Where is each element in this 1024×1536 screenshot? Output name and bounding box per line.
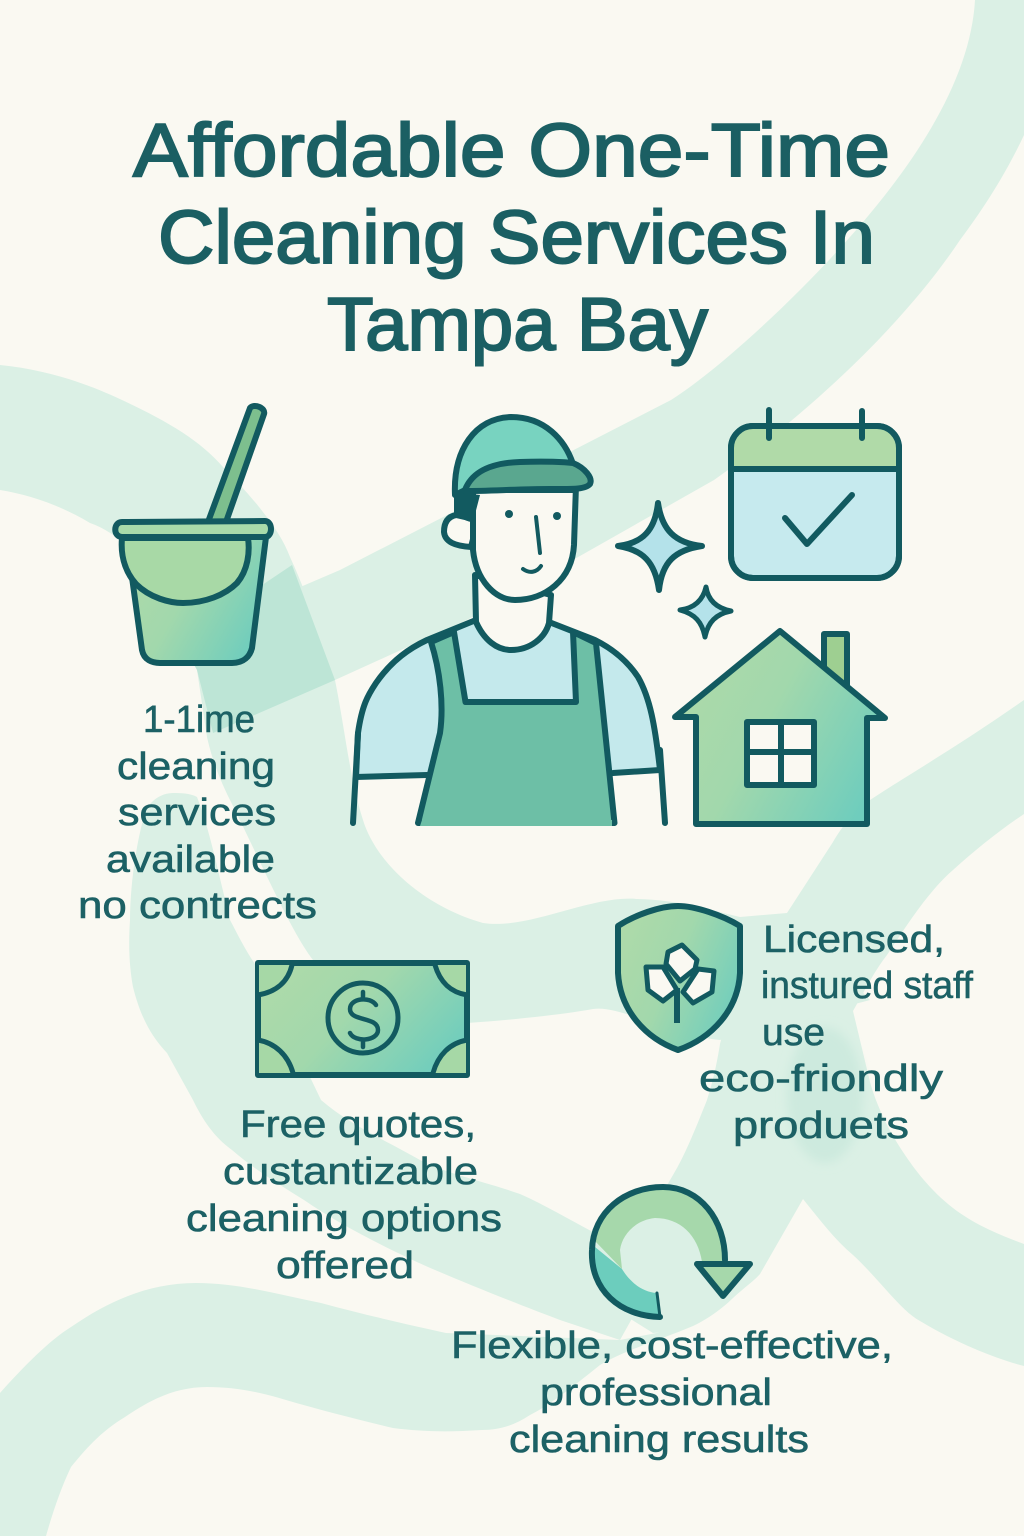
text: flexible results: professional	[540, 1372, 772, 1414]
text: one-time services: available	[106, 839, 275, 881]
text: licensed staff: produets	[733, 1105, 909, 1147]
hair	[454, 492, 480, 522]
text: licensed staff: instured staff	[761, 965, 973, 1007]
icon: shield with leaf	[618, 906, 740, 1050]
text: licensed staff: use	[762, 1012, 825, 1054]
icon: large sparkle	[618, 503, 702, 590]
text: one-time services: no contrects	[78, 885, 317, 927]
ear	[444, 515, 478, 547]
text: one-time services: services	[118, 792, 276, 834]
icon: calendar with check	[731, 410, 899, 578]
text: flexible results: Flexible, cost-effective,	[451, 1325, 893, 1367]
text: free quotes: offered	[276, 1245, 414, 1287]
icon: house	[675, 631, 885, 824]
text: one-time services	[78, 699, 317, 927]
neck	[475, 575, 551, 650]
face	[473, 485, 576, 600]
title: Tampa Bay	[327, 282, 709, 366]
shirt	[356, 620, 660, 777]
overalls apron	[418, 632, 614, 823]
text: flexible results: cleaning results	[509, 1419, 809, 1461]
title: Cleaning Services In	[158, 195, 875, 279]
cap brim	[465, 462, 591, 491]
text: free quotes: cleaning options	[186, 1198, 502, 1240]
arm lines	[353, 733, 665, 823]
text: flexible results	[451, 1325, 893, 1461]
cap	[455, 417, 575, 495]
icon: cleaner worker	[353, 417, 665, 826]
text: free quotes: custantizable	[223, 1151, 478, 1193]
title: Affordable One-Time	[133, 108, 890, 192]
title	[133, 108, 890, 366]
icon: small sparkle	[680, 587, 731, 637]
icon: circular arrow	[592, 1187, 750, 1317]
text: licensed staff: eco-friondly	[699, 1058, 943, 1100]
icon: dollar bill	[258, 963, 467, 1075]
eyes, nose, smile	[505, 510, 513, 518]
text: free quotes	[186, 1104, 502, 1287]
text: licensed staff: Licensed,	[763, 919, 945, 961]
text: licensed staff	[699, 919, 973, 1147]
icon: bucket with mop handle	[115, 406, 271, 663]
text: one-time services: 1-1ime	[143, 699, 255, 741]
text: free quotes: Free quotes,	[240, 1104, 476, 1146]
text: one-time services: cleaning	[117, 746, 275, 788]
